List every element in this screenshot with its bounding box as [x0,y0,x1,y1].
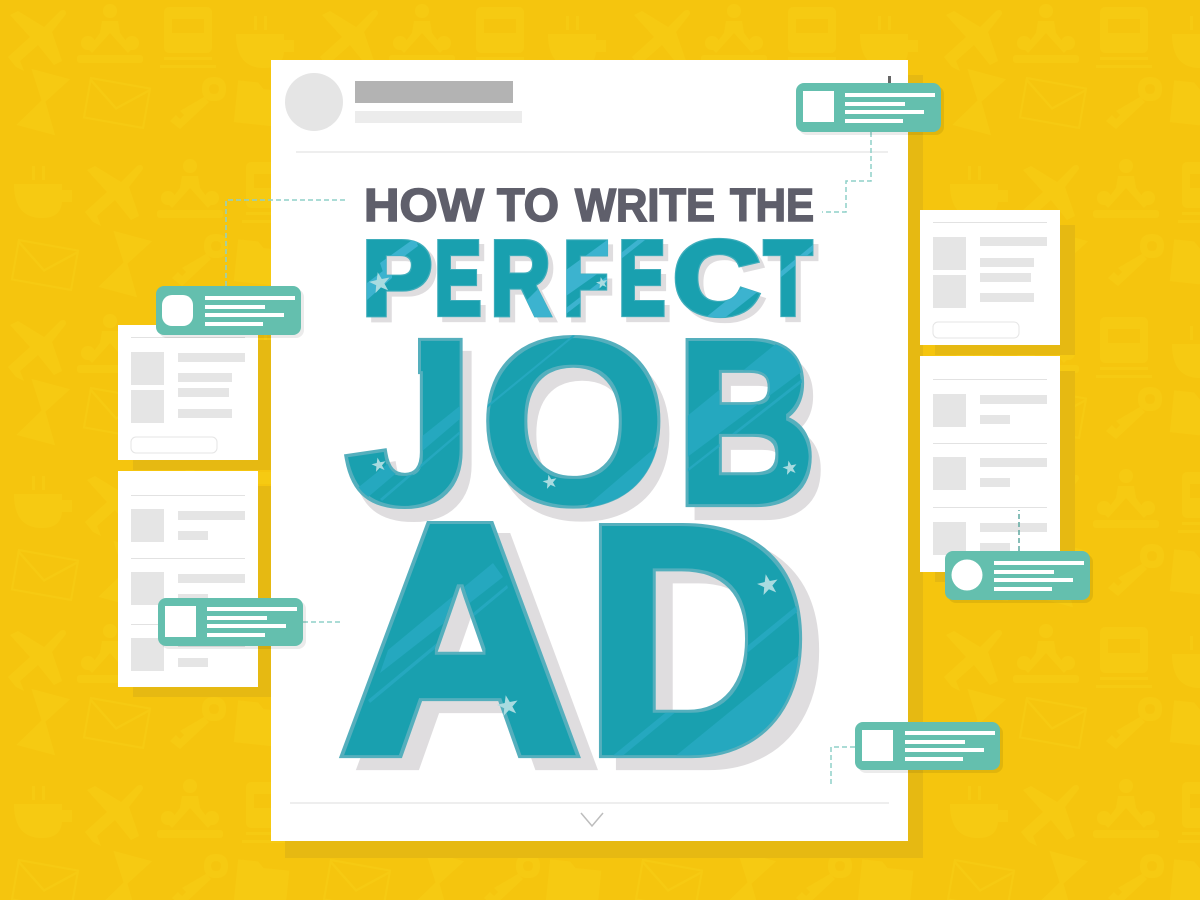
dashed connector lines [226,132,1019,785]
title word: perfect: T [764,218,812,337]
heading: how to write the: TO [497,179,559,231]
panel: left job card 2 [118,471,271,697]
heading: how to write the: WRITE [575,179,715,231]
title word: perfect: R [490,220,551,338]
title word: job: O [479,289,668,554]
title word: job [344,335,821,522]
gloss stripes on ad [368,563,812,760]
title word: ad: A [341,459,579,820]
title word: ad [341,459,809,821]
heading: how to write the: THE [730,179,814,231]
heading: how to write the: HOW [364,179,485,231]
heading: how to write the [364,179,814,231]
panel: left job card 1 [118,325,271,470]
panel: right job card 2 [920,356,1075,582]
title word: perfect [362,218,812,338]
title word: perfect: P [362,219,432,338]
callout: top right [796,83,944,135]
title word: ad: D [584,460,809,821]
title word: perfect: F [563,220,609,338]
title word: job: B [677,294,816,552]
stars on title letters [367,270,798,717]
panel: main job ad sheet [271,60,923,858]
callout: right middle [945,551,1093,603]
gloss stripes on job [355,335,808,512]
title word: perfect: E [618,219,666,338]
callout: bottom right [855,722,1003,773]
title word: perfect: C [673,220,761,338]
title word: perfect: E [434,219,482,338]
callout: left lower [158,598,306,649]
panel: right job card 1 [920,210,1075,355]
callout: left upper [156,286,304,338]
gloss stripes on perfect [367,238,815,320]
title word: job: J [346,292,473,551]
